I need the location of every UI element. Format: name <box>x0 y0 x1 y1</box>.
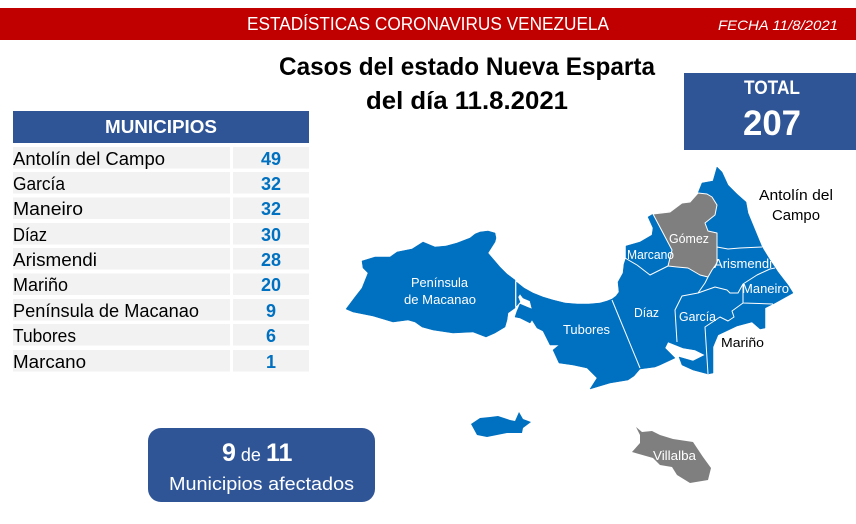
table header <box>13 111 309 143</box>
region: Villalba <box>632 427 711 483</box>
row: Mariño <box>13 274 309 295</box>
region: main island east <box>515 167 793 389</box>
row: Díaz <box>13 223 309 245</box>
row: Antolín del Campo: 49 <box>261 149 281 169</box>
row: Península de Macanao: Península de Macanao <box>13 301 199 321</box>
row: Marcano: 1 <box>266 352 276 372</box>
row: Tubores: Tubores <box>13 326 76 346</box>
row: Marcano <box>13 350 309 372</box>
callout: municipios afectados <box>148 428 375 502</box>
map labels <box>404 187 833 463</box>
panel: total: TOTAL <box>744 78 800 99</box>
map labels: Marcano <box>627 247 674 262</box>
region: Coche island <box>471 412 531 437</box>
map labels: Antolín del <box>759 187 833 204</box>
header bar <box>0 8 856 40</box>
region: Gómez <box>653 193 717 277</box>
row: García: García <box>13 174 66 194</box>
title <box>279 53 656 115</box>
row: Marcano: Marcano <box>13 352 86 372</box>
row: Antolín del Campo <box>13 147 309 169</box>
map labels: García <box>679 309 717 324</box>
row: Mariño: Mariño <box>13 275 68 295</box>
map labels: Campo <box>772 207 820 224</box>
map labels: Villalba <box>653 448 697 463</box>
row: Arismendi: 28 <box>261 250 281 270</box>
panel: total: 207 <box>743 104 801 143</box>
row: Antolín del Campo: Antolín del Campo <box>13 149 165 169</box>
map: Nueva Esparta <box>346 167 833 483</box>
row: Maneiro <box>13 198 309 219</box>
row: García: 32 <box>261 174 281 194</box>
map labels: Maneiro <box>742 281 789 296</box>
callout: municipios afectados: 9 de11 <box>222 439 292 467</box>
callout: municipios afectados: Municipios afectados <box>169 474 354 494</box>
row: Mariño: 20 <box>261 275 281 295</box>
row: Península de Macanao: 9 <box>266 301 276 321</box>
header bar: ESTADÍSTICAS CORONAVIRUS VENEZUELA <box>247 14 609 34</box>
region borders <box>516 247 775 374</box>
map labels: Tubores <box>563 322 610 337</box>
row: Maneiro: Maneiro <box>13 199 83 219</box>
row: Arismendi <box>13 248 309 270</box>
header bar: FECHA 11/8/2021 <box>718 17 838 33</box>
table: municipios <box>13 111 309 372</box>
title: Casos del estado Nueva Esparta <box>279 53 656 81</box>
map labels: Península <box>411 275 469 290</box>
row: Tubores <box>13 324 309 346</box>
map labels: Arismendi <box>714 256 772 271</box>
map labels: Gómez <box>669 231 709 246</box>
row: Tubores: 6 <box>266 326 276 346</box>
map labels: Mariño <box>721 335 764 350</box>
map labels: de Macanao <box>404 292 476 307</box>
row: Arismendi: Arismendi <box>13 250 97 270</box>
title: del día 11.8.2021 <box>366 87 568 115</box>
row: Península de Macanao <box>13 299 309 321</box>
map labels: Díaz <box>634 305 659 320</box>
row: García <box>13 172 309 194</box>
table header: MUNICIPIOS <box>105 117 217 137</box>
panel: total <box>684 73 856 150</box>
row: Díaz: 30 <box>261 225 281 245</box>
row: Díaz: Díaz <box>13 225 47 245</box>
row: Maneiro: 32 <box>261 199 281 219</box>
region: Península de Macanao <box>346 231 515 337</box>
